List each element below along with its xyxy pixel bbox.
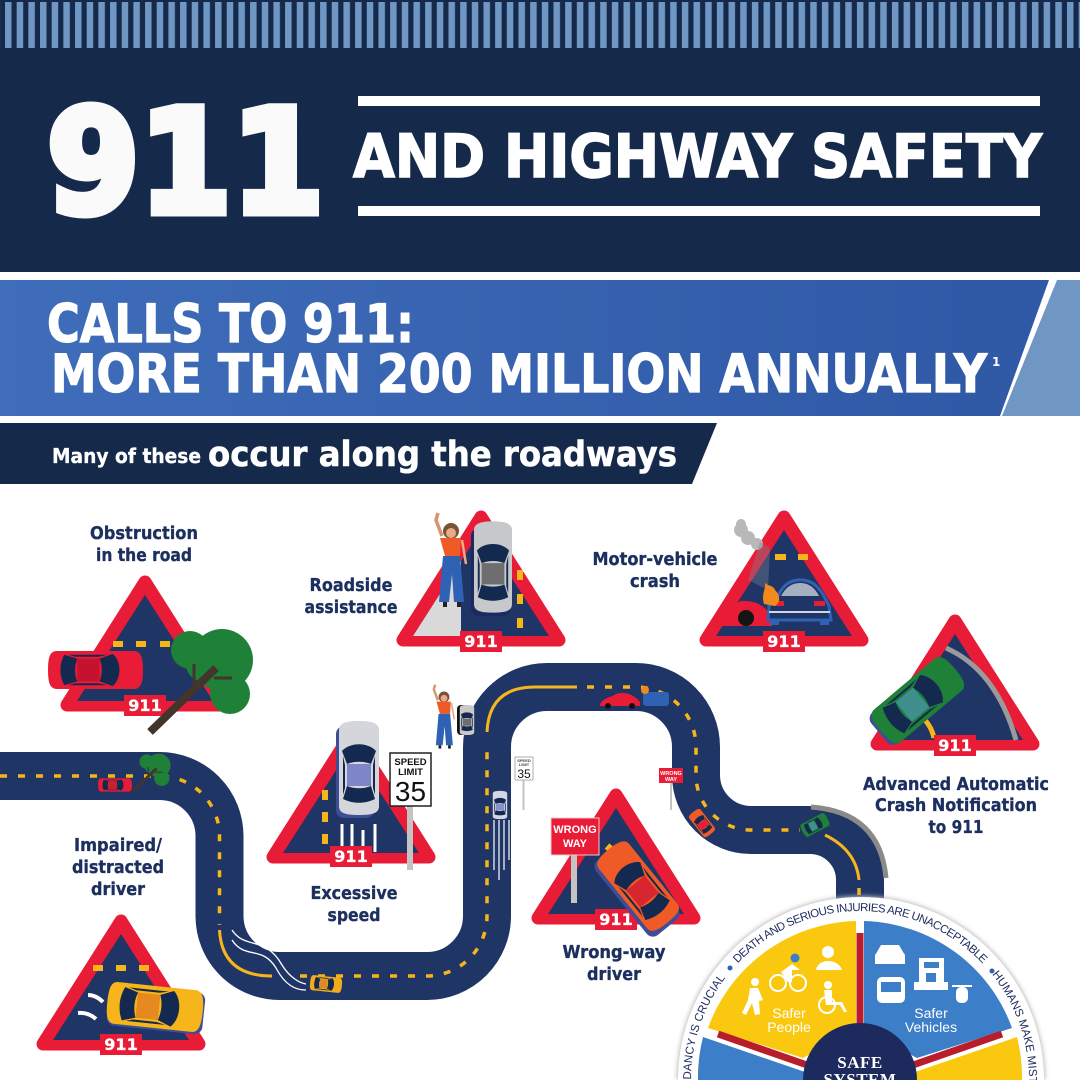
small red car and fallen tree	[98, 754, 171, 793]
icons: safer vehicles	[875, 945, 972, 1003]
rim dots	[728, 966, 994, 974]
text: safer vehicles	[905, 1005, 957, 1035]
hub text: SAFE	[837, 1053, 883, 1072]
small wrong way sign: WRONG	[660, 771, 682, 777]
label: excessive speed: speed	[328, 905, 380, 926]
small crash scene	[600, 686, 669, 709]
header: title band	[0, 0, 1080, 272]
title bottom rule	[358, 206, 1040, 216]
lane dashes	[322, 790, 328, 844]
label: roadside assistance: Roadside	[310, 575, 392, 596]
label: obstruction: Obstruction	[90, 523, 198, 544]
911 tag: 911	[599, 910, 633, 929]
small silver car with speed lines	[493, 791, 509, 880]
green car	[867, 653, 969, 747]
sign: impaired distracted driver	[43, 921, 206, 1055]
speed limit sign: SPEED	[394, 757, 427, 768]
shoulder	[413, 561, 461, 636]
title number 911: 911	[47, 79, 324, 246]
wreck wheel	[738, 610, 754, 626]
car shadow	[336, 726, 374, 818]
winding road	[0, 685, 886, 993]
car shadow	[471, 528, 511, 616]
sign: roadside assistance	[403, 513, 559, 652]
lane dashes	[517, 570, 523, 628]
label: roadside assistance: assistance	[304, 597, 398, 618]
speed limit sign: LIMIT	[398, 767, 423, 778]
yellow curve	[925, 720, 934, 738]
flames	[763, 583, 779, 606]
911 tag: 911	[334, 847, 368, 866]
skid marks on road	[232, 930, 306, 990]
label: advanced automatic crash notification: Advanced Automatic	[863, 774, 1049, 795]
road dashes	[113, 641, 170, 647]
lane dashes	[607, 846, 647, 891]
label: obstruction	[90, 523, 198, 566]
wrong way sign: WRONG	[553, 824, 597, 836]
small speed sign: 35	[517, 767, 531, 781]
sign: motor-vehicle crash	[706, 517, 862, 652]
icons: safer people	[742, 946, 847, 1015]
label: motor-vehicle crash: Motor-vehicle	[592, 549, 718, 570]
skid marks	[78, 995, 103, 1019]
911 tag: 911	[464, 632, 498, 651]
title top rule	[358, 96, 1040, 106]
911 tag: 911	[104, 1035, 138, 1054]
banner heading line 1: CALLS TO 911:	[47, 294, 414, 355]
sector: lower left	[698, 1037, 805, 1080]
small green car	[799, 812, 831, 838]
blue car rear	[768, 580, 831, 625]
sign: excessive speed	[273, 721, 431, 870]
car shadow	[866, 656, 966, 748]
sector dividers	[718, 933, 1002, 1065]
label: obstruction: in the road	[96, 545, 192, 566]
text: safer people: People	[767, 1019, 811, 1035]
road centre markings	[0, 687, 859, 976]
lane dashes	[93, 965, 149, 971]
label: advanced automatic crash notification	[863, 774, 1049, 838]
911 tag: 911	[938, 736, 972, 755]
stripe band	[0, 2, 1080, 48]
label: wrong-way driver	[562, 942, 666, 985]
small yellow car	[309, 975, 343, 993]
subheading band	[0, 423, 717, 484]
smoke	[734, 519, 770, 590]
banner accent parallelogram	[1002, 280, 1080, 416]
footnote marker: 1	[992, 355, 1000, 369]
text: safer vehicles: Vehicles	[905, 1019, 957, 1035]
label: excessive speed: Excessive	[310, 883, 398, 904]
small speed sign	[515, 757, 533, 810]
911 tag: 911	[767, 632, 801, 651]
road guardrail	[811, 807, 886, 878]
label: wrong-way driver: Wrong-way	[562, 942, 666, 963]
subheading small text: Many of these	[52, 444, 201, 468]
speed limit sign: 35	[395, 776, 426, 807]
fallen tree	[150, 629, 253, 732]
text: safer vehicles: Safer	[914, 1005, 948, 1021]
yellow car	[105, 981, 205, 1033]
sign: obstruction in the road	[48, 582, 253, 732]
car shadow	[591, 840, 683, 940]
label: motor-vehicle crash: crash	[630, 571, 680, 592]
subheading large text: occur along the roadways	[208, 435, 677, 475]
911 tag: 911	[128, 696, 162, 715]
small speed sign: LIMIT	[519, 762, 530, 767]
wrong way sign: WAY	[563, 838, 588, 850]
small wrong way sign: WAY	[665, 777, 677, 783]
grey car	[474, 521, 512, 613]
label: wrong-way driver: driver	[587, 964, 641, 985]
label: impaired distracted driver: distracted	[72, 857, 164, 878]
banner: calls to 911	[0, 280, 1080, 416]
label: roadside assistance	[304, 575, 398, 618]
label: advanced automatic crash notification: to 911	[928, 817, 984, 838]
curved principle text: HUMANS MAKE MISTAKES	[992, 970, 1037, 1080]
orange car	[593, 837, 683, 935]
label: motor-vehicle crash	[592, 549, 718, 592]
sign: advanced automatic crash notification	[866, 621, 1033, 756]
waving person	[436, 513, 466, 607]
wrong way sign	[551, 818, 599, 903]
guardrail curve	[946, 648, 1016, 740]
car shadow	[106, 983, 206, 1035]
label: advanced automatic crash notification: Crash Notification	[875, 795, 1037, 816]
label: impaired distracted driver: driver	[91, 879, 145, 900]
red car	[48, 651, 143, 689]
label: excessive speed	[310, 883, 398, 926]
sector: lower right	[915, 1037, 1022, 1080]
label: impaired distracted driver: Impaired/	[74, 835, 162, 856]
hub text	[824, 1053, 896, 1080]
speed lines	[342, 824, 375, 852]
red car wreck	[715, 601, 772, 626]
small person	[434, 685, 454, 749]
sign: wrong-way driver	[538, 795, 694, 940]
sector: safer people	[708, 921, 856, 1058]
sector: safer vehicles	[864, 921, 1012, 1058]
text: safer people	[767, 1005, 811, 1035]
speed limit sign	[390, 753, 431, 870]
hub	[803, 1023, 917, 1080]
curved principle text: DEATH AND SERIOUS INJURIES ARE UNACCEPTABLE	[732, 903, 988, 964]
small roadside car	[457, 705, 474, 735]
lane dashes	[775, 554, 808, 560]
text: safer people: Safer	[772, 1005, 806, 1021]
small speed sign: SPEED	[517, 758, 531, 763]
curved principle text: REDUNDANCY IS CRUCIAL	[683, 976, 726, 1079]
label: impaired distracted driver	[72, 835, 164, 900]
small orange car	[688, 807, 716, 839]
small wrong way sign	[659, 768, 683, 810]
silver car	[339, 721, 379, 815]
